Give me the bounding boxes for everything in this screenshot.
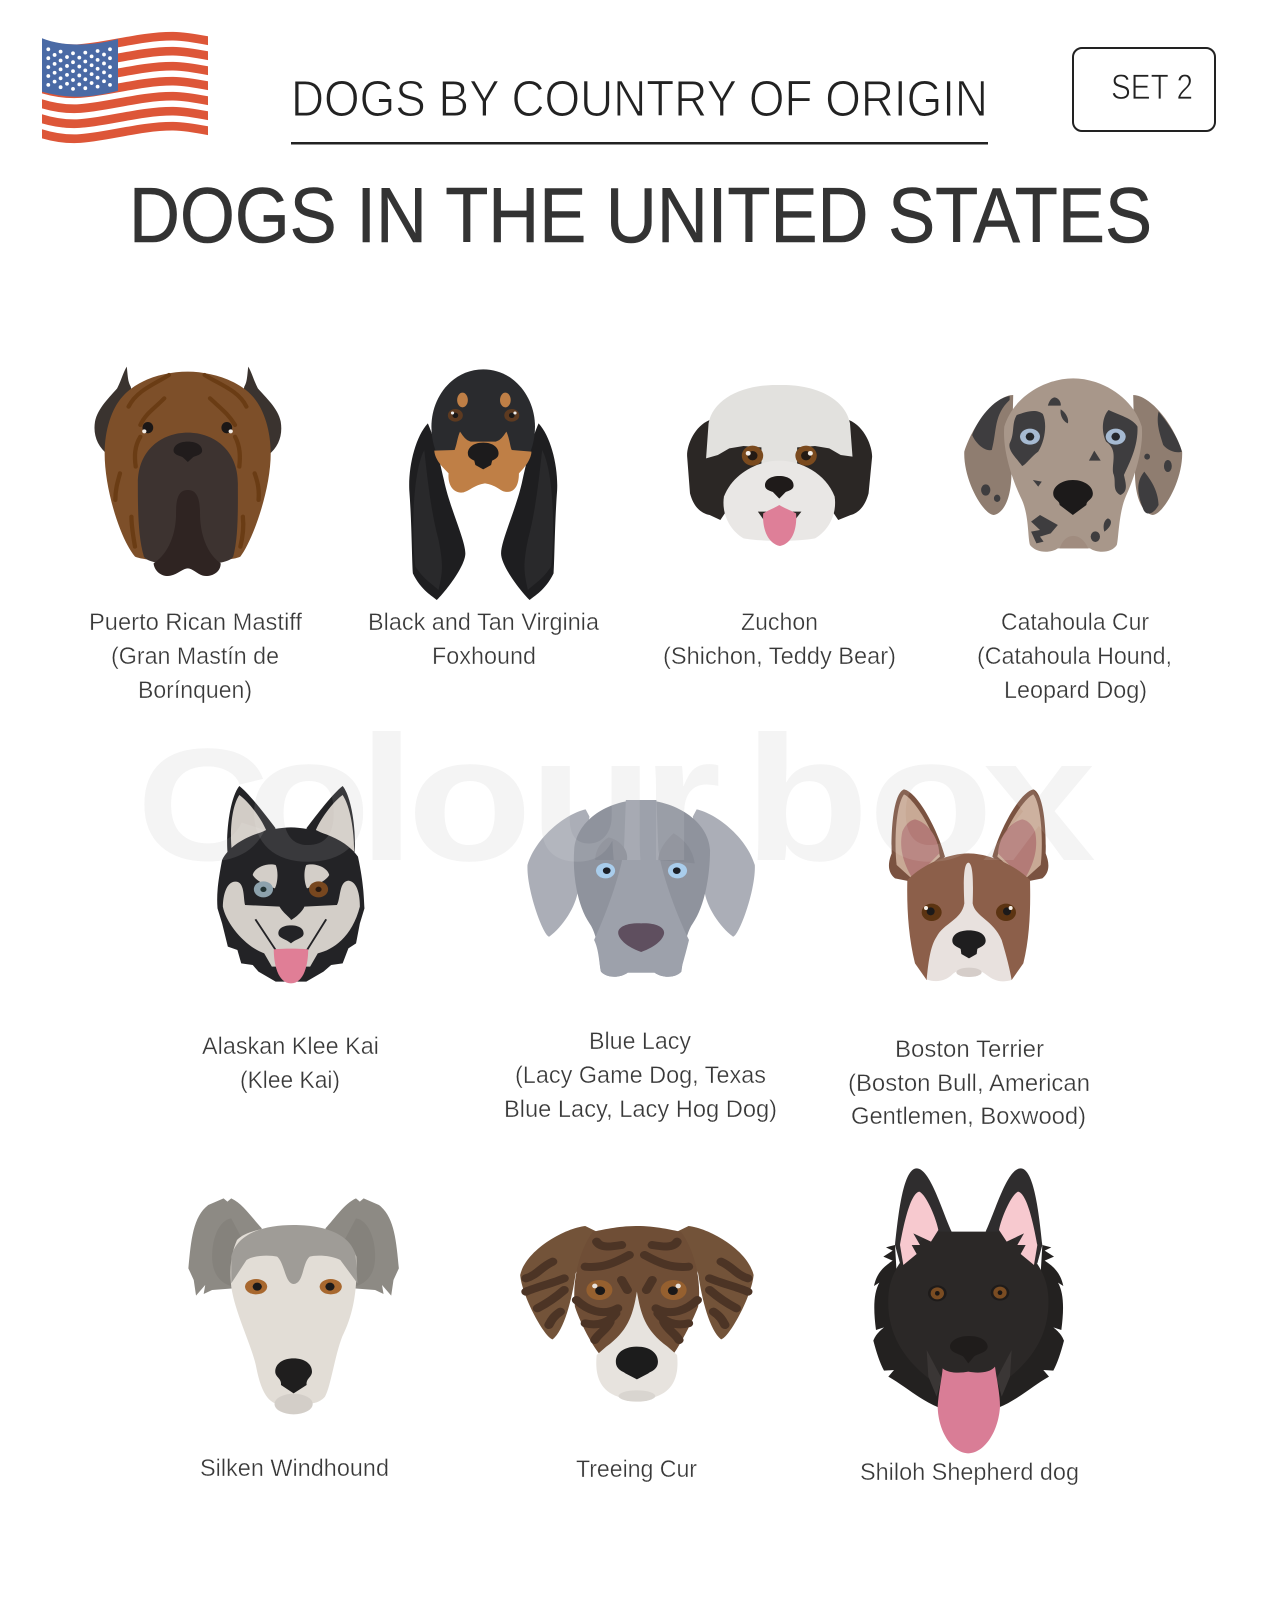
label: alaskan klee kai <box>202 1033 379 1094</box>
label: silken windhound: Silken Windhound <box>200 1455 389 1482</box>
label: blue lacy: (Lacy Game Dog, Texas <box>515 1062 766 1089</box>
label: zuchon: Zuchon <box>741 609 818 636</box>
watermark: olourbox <box>246 699 1096 898</box>
icon: shiloh shepherd head <box>873 1168 1064 1453</box>
card: boston terrier <box>848 789 1090 1130</box>
watermark overlay: C <box>137 715 270 894</box>
subtitle: DOGS BY COUNTRY OF ORIGIN <box>291 70 988 127</box>
card: blue lacy <box>504 800 777 1123</box>
icon: catahoula head <box>964 378 1182 552</box>
label: zuchon: (Shichon, Teddy Bear) <box>663 643 896 670</box>
label: catahoula cur <box>977 609 1172 704</box>
label: catahoula cur: (Catahoula Hound, <box>977 643 1172 670</box>
icon: boston terrier head <box>889 789 1048 981</box>
card: shiloh shepherd dog <box>860 1168 1079 1486</box>
watermark overlay: olourbox <box>246 699 1096 898</box>
label: foxhound <box>368 609 600 670</box>
label: boston terrier: Boston Terrier <box>895 1036 1044 1063</box>
label: alaskan klee kai: (Klee Kai) <box>240 1067 340 1094</box>
icon: blue lacy head <box>527 800 755 977</box>
card: zuchon <box>663 385 896 670</box>
label: puerto rican mastiff: (Gran Mastín de <box>111 643 279 670</box>
icon: treeing cur head <box>520 1226 754 1402</box>
label: boston terrier: Gentlemen, Boxwood) <box>851 1103 1086 1130</box>
label: treeing cur: Treeing Cur <box>576 1456 697 1483</box>
label: boston terrier: (Boston Bull, American <box>848 1070 1090 1097</box>
label: puerto rican mastiff <box>89 609 302 704</box>
label: blue lacy <box>504 1028 777 1123</box>
watermark: C <box>137 715 270 894</box>
title: DOGS IN THE UNITED STATES <box>129 171 1152 259</box>
icon: klee kai head <box>217 786 364 983</box>
card: puerto rican mastiff <box>89 367 302 704</box>
badge: set 2 <box>1073 48 1215 131</box>
icon: silken windhound head <box>188 1198 399 1414</box>
label: shiloh shepherd dog: Shiloh Shepherd dog <box>860 1459 1079 1486</box>
label: zuchon <box>663 609 896 670</box>
card: treeing cur <box>520 1226 754 1483</box>
label: boston terrier <box>848 1036 1090 1130</box>
icon: american flag <box>38 36 212 139</box>
label: alaskan klee kai: Alaskan Klee Kai <box>202 1033 379 1060</box>
icon: mastiff head <box>94 367 281 576</box>
label: catahoula cur: Catahoula Cur <box>1001 609 1149 636</box>
card: catahoula cur <box>964 378 1182 704</box>
label: foxhound: Foxhound <box>432 643 536 670</box>
icon: foxhound head <box>409 369 557 600</box>
label: blue lacy: Blue Lacy <box>589 1028 691 1055</box>
label: puerto rican mastiff: Borínquen) <box>138 677 252 704</box>
icon: zuchon head <box>687 385 872 546</box>
label: foxhound: Black and Tan Virginia <box>368 609 600 636</box>
badge: set 2: SET 2 <box>1111 68 1193 107</box>
card: black and tan virginia foxhound <box>368 369 600 670</box>
label: puerto rican mastiff: Puerto Rican Mastiff <box>89 609 302 636</box>
label: catahoula cur: Leopard Dog) <box>1004 677 1147 704</box>
card: silken windhound <box>188 1198 399 1482</box>
card: alaskan klee kai <box>202 786 379 1094</box>
label: blue lacy: Blue Lacy, Lacy Hog Dog) <box>504 1096 777 1123</box>
